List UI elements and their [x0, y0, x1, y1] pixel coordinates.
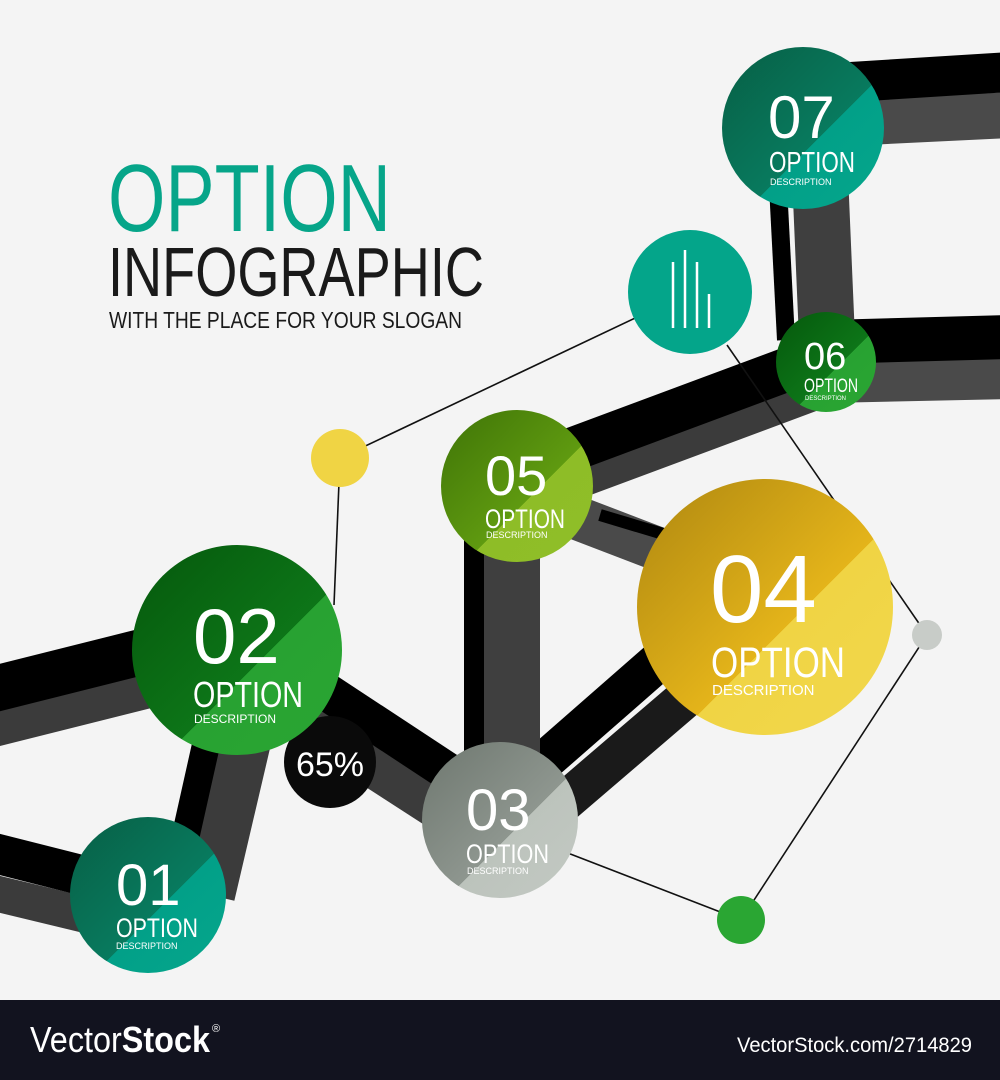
option 04: 04: [710, 536, 817, 643]
option 05: OPTION: [485, 504, 565, 534]
option 02: OPTION: [193, 674, 303, 715]
thin connector lines: [334, 292, 927, 920]
badge: 65%: [284, 716, 376, 808]
option 05: DESCRIPTION: [486, 530, 548, 540]
title: WITH THE PLACE FOR YOUR SLOGAN: [109, 307, 462, 333]
option 06: [776, 312, 876, 412]
option 03: OPTION: [466, 839, 549, 869]
dot: gray: [912, 620, 942, 650]
title: [108, 145, 484, 333]
option 04: DESCRIPTION: [712, 682, 815, 699]
badge: 65%: 65%: [296, 746, 364, 784]
option 05: [441, 410, 593, 562]
option 02: [132, 545, 342, 755]
footer: [0, 1000, 1000, 1080]
icon: bar chart circle: [628, 230, 752, 354]
option 06: DESCRIPTION: [805, 396, 846, 402]
option 01: DESCRIPTION: [116, 941, 178, 951]
option 01: [70, 817, 226, 973]
option 02: 02: [193, 592, 280, 680]
footer: ®: [212, 1023, 220, 1035]
option 01: 01: [116, 853, 181, 918]
title: INFOGRAPHIC: [108, 233, 484, 311]
option 02: DESCRIPTION: [194, 712, 276, 726]
option 04: OPTION: [711, 639, 845, 687]
dot: yellow: [311, 429, 369, 487]
bands: [0, 72, 1000, 930]
option 03: [422, 742, 578, 898]
option 03: 03: [466, 778, 531, 843]
option 06: OPTION: [804, 376, 858, 397]
option 07: OPTION: [769, 147, 855, 179]
option 07: [722, 47, 884, 209]
option 07: DESCRIPTION: [770, 177, 832, 187]
option 04: [637, 479, 893, 735]
footer: VectorStock.com/2714829: [737, 1034, 972, 1057]
option 07: 07: [768, 84, 835, 151]
option 03: DESCRIPTION: [467, 866, 529, 876]
option 06: 06: [804, 336, 846, 378]
dot: green: [717, 896, 765, 944]
footer: VectorStock: [30, 1019, 211, 1060]
option 05: 05: [485, 444, 547, 507]
title: OPTION: [108, 145, 391, 252]
option 01: OPTION: [116, 913, 198, 943]
